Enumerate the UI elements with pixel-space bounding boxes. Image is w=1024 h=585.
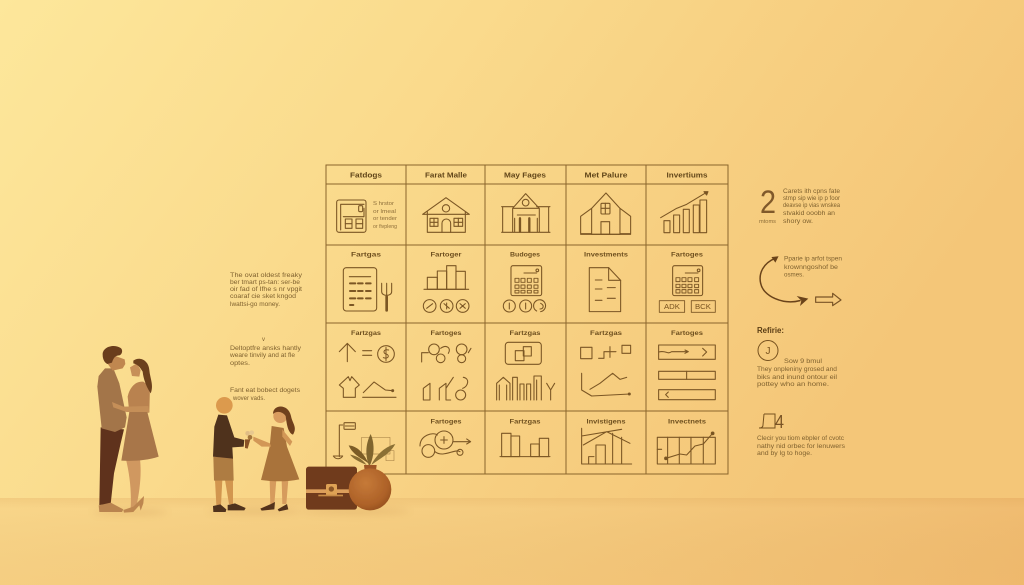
icon: arrow equals dollar [339, 343, 396, 397]
icon: house [423, 198, 469, 232]
right note: refine: They onpleniny grosed and [757, 366, 838, 373]
cell note text [373, 201, 711, 311]
row labels: Fartoges [671, 252, 703, 258]
right note: refine: biks and inund ontour eil [757, 374, 837, 381]
right note: number two [759, 184, 841, 225]
left text: block two [229, 337, 302, 367]
icon: rising bars [661, 192, 708, 233]
icons rows three and four [333, 342, 715, 464]
icon: ledger [337, 200, 366, 232]
figure: girl [253, 406, 299, 511]
left text: block one: lwattsi-go money. [230, 301, 280, 308]
figure: bouquet [245, 430, 254, 449]
right note: number two: shory ow. [783, 218, 813, 225]
row labels: Invistigens [586, 418, 626, 426]
icon: document [589, 268, 621, 312]
right note: number two: 2 [760, 184, 776, 220]
icon: linked coins [422, 344, 471, 400]
right note: refine: pottey who an home. [757, 381, 829, 388]
right note: number two: deavse ip vias wnskea [783, 202, 840, 209]
row labels [351, 252, 706, 426]
left text: block two: weare tinvily and at fle [229, 352, 296, 359]
left text: block two: optes. [230, 360, 250, 367]
right note: curved arrow: Pparie ip arfot tspen [784, 256, 843, 262]
icon: flag post [333, 423, 394, 461]
right note: document four: nathy nid orbec for lenuwers [757, 443, 845, 450]
table grid [326, 165, 728, 474]
right note: document four: 4 [775, 412, 784, 432]
right note: number two: mtoms [759, 219, 776, 225]
illustration: children [213, 397, 299, 512]
table header row: Fatdogs [350, 170, 382, 180]
right note: number two: stmp sip wie ip p foor [783, 195, 840, 202]
table header row: Invertiums [666, 170, 708, 180]
right note: curved arrow [760, 256, 843, 306]
left text: block three [230, 387, 300, 402]
icons rows one and two [337, 192, 715, 312]
left text: block one: The ovat oldest freaky [230, 272, 303, 279]
icon: roof chart [582, 428, 632, 464]
figure: man [97, 346, 127, 512]
figure: boy [213, 397, 246, 512]
cell note text: or tender [373, 216, 397, 222]
left text: block one: coaraf cie sket kngod [230, 293, 297, 300]
right note: refine [757, 326, 838, 388]
icon: frame and skyline [497, 342, 555, 400]
icon: bar chart [500, 433, 550, 457]
illustration: briefcase and vase [306, 434, 395, 510]
right note: document four: and by lg to hoge. [757, 450, 812, 457]
cell note text: S hrstor [373, 201, 394, 207]
right note: number two: stvakid ooobh an [783, 210, 836, 217]
table header row: May Fages [504, 170, 546, 180]
row labels: Fartzgas [590, 330, 622, 337]
row labels: Invectnets [668, 418, 706, 426]
icon: bars with coins [423, 266, 469, 312]
left text: block three: wover vads. [232, 395, 265, 402]
right note: document four: Clecir you tiom ebpler of cvotc [757, 435, 844, 442]
left text: block two: v [262, 337, 265, 343]
icon: tall house [581, 193, 631, 234]
row labels: Fartoges [430, 418, 462, 426]
right note: document four [757, 412, 845, 457]
row labels: Investments [584, 252, 628, 258]
icon: curved arrow [760, 257, 841, 306]
cell note text: or fivpleng [373, 224, 397, 230]
row labels: Fartoges [671, 330, 703, 337]
table header row [350, 170, 708, 180]
row labels: Budoges [510, 252, 540, 258]
icon: rings with arrow [420, 431, 471, 457]
left text: block two: Deltoptfre ansks hantly [230, 345, 302, 352]
figure: woman [112, 359, 159, 513]
row labels: Fartzgas [510, 330, 541, 337]
right note: curved arrow: osmes. [784, 272, 804, 278]
left text: block one: oir fad of Ifhe s nr vpgit [230, 286, 302, 293]
icon: trend grid [657, 432, 715, 464]
row labels: Fartoges [430, 330, 462, 337]
icon: calculator and fork [343, 268, 392, 311]
illustration: couple [97, 346, 159, 513]
floor shadows [92, 508, 410, 515]
icon: bank [502, 194, 550, 232]
left text: block one [230, 272, 303, 308]
vase with plant [349, 434, 395, 510]
icon: circled letter: J [766, 346, 770, 357]
row labels: Fartzgas [351, 330, 381, 337]
icon: bars with arrows [659, 345, 715, 400]
right note: curved arrow: krownngoshof be [784, 264, 839, 271]
cell note text: BCK [695, 304, 711, 311]
left text: block one: ber tmart ps-tan: ser-be [230, 279, 301, 286]
icon: calendar with tags [659, 266, 715, 312]
row labels: Fartgas [351, 252, 381, 258]
left text: block three: Fant eat bobect dogets [230, 387, 300, 394]
icon: squares and line chart [581, 345, 631, 396]
row labels: Fartoger [430, 252, 462, 258]
cell note text: ADK [664, 304, 680, 311]
cell note text: or lmeal [373, 209, 396, 215]
right note: number two: Carets ith cpns fate [783, 188, 841, 195]
row labels: Fartzgas [510, 418, 541, 426]
right note: refine: Sow 9 bmul [784, 358, 822, 365]
table header row: Met Palure [584, 170, 628, 180]
table header row: Farat Malle [425, 170, 467, 180]
floor [0, 498, 1024, 585]
icon: calendar with coins [503, 266, 546, 312]
right note: refine: Refirie: [757, 326, 784, 335]
icon: small page [759, 414, 775, 428]
briefcase [306, 467, 357, 510]
